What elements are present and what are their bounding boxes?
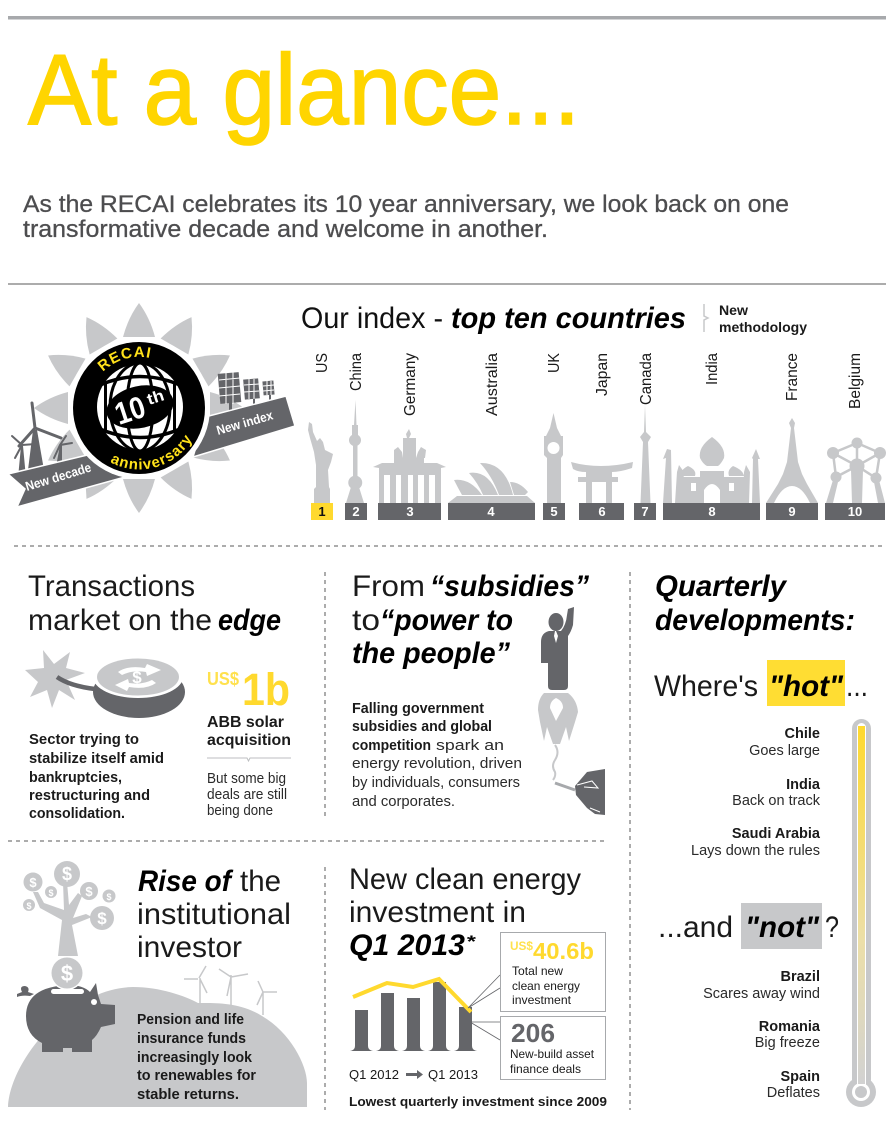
country labels: Canada bbox=[638, 353, 655, 405]
rank bars: 9 bbox=[788, 504, 796, 519]
hot list: Chile bbox=[785, 726, 820, 742]
text: body bbox=[352, 701, 522, 810]
where's hot label: "hot" bbox=[769, 670, 844, 703]
text: body: energy revolution, driven bbox=[352, 756, 522, 772]
intro text bbox=[23, 191, 789, 243]
stat: US$1b: But some big bbox=[207, 771, 286, 787]
icon: money tree: $ bbox=[48, 888, 54, 898]
rank bars: 1 bbox=[318, 504, 326, 519]
heading: “power to bbox=[380, 604, 513, 637]
new methodology note: New bbox=[719, 302, 748, 318]
icon: money tree: $ bbox=[106, 892, 112, 902]
icon: globe bbox=[97, 363, 183, 451]
callout: 40.6b: clean energy bbox=[512, 979, 580, 993]
hot list: Back on track bbox=[732, 793, 821, 809]
country labels: France bbox=[784, 353, 801, 401]
heading bbox=[28, 570, 281, 637]
not list: Deflates bbox=[767, 1085, 820, 1101]
landmark skyline bbox=[308, 400, 886, 503]
text: pension: increasingly look bbox=[137, 1050, 253, 1066]
country labels: Belgium bbox=[847, 353, 864, 409]
text: body: Falling government bbox=[352, 701, 484, 717]
heading: our index bbox=[301, 302, 686, 335]
axis labels with arrow: Q1 2013 bbox=[428, 1067, 478, 1082]
heading: the people” bbox=[352, 637, 510, 670]
panel: subsidies bbox=[352, 570, 605, 815]
callout: 206: New-build asset bbox=[510, 1047, 595, 1061]
not list: Romania bbox=[759, 1019, 821, 1035]
callout: 40.6b: US$ bbox=[510, 939, 533, 953]
not list: Big freeze bbox=[755, 1035, 820, 1051]
hot list: India bbox=[786, 777, 821, 793]
rank bars: 2 bbox=[352, 504, 360, 519]
stat: US$1b bbox=[207, 664, 291, 819]
heading: New clean energy bbox=[349, 863, 581, 896]
icon: sydney opera house bbox=[448, 463, 535, 503]
stat: US$1b: ABB solar bbox=[207, 714, 284, 731]
text: sector: restructuring and bbox=[29, 788, 150, 804]
rank bars: 8 bbox=[708, 504, 716, 519]
heading bbox=[349, 863, 581, 962]
heading bbox=[655, 570, 855, 637]
heading bbox=[137, 865, 291, 964]
ribbon: new decade bbox=[8, 452, 125, 507]
not list: Scares away wind bbox=[703, 986, 820, 1002]
icon: atomium bbox=[826, 438, 886, 503]
stat: US$1b: US$ bbox=[207, 669, 239, 689]
anniversary badge: 10 bbox=[110, 389, 150, 432]
text: body: by individuals, consumers bbox=[352, 775, 520, 791]
and not label: "not" bbox=[745, 911, 820, 944]
where's hot label bbox=[654, 660, 868, 706]
icon: money tree: $ bbox=[85, 884, 93, 899]
panel: clean energy investment bbox=[349, 863, 607, 1109]
callout: 40.6b: investment bbox=[512, 993, 572, 1007]
not list: Spain bbox=[781, 1069, 820, 1085]
heading: institutional bbox=[137, 898, 291, 931]
stat: US$1b: 1b bbox=[242, 664, 290, 715]
heading: Rise of bbox=[138, 865, 234, 898]
intro text: As the RECAI celebrates its 10 year anniversary, we look back on one bbox=[23, 191, 789, 218]
icon: big ben bbox=[544, 413, 563, 503]
bar chart bbox=[350, 975, 500, 1051]
RECAI arc: RECAI bbox=[97, 346, 151, 372]
rank bars: 6 bbox=[598, 504, 606, 519]
stat: US$1b: acquisition bbox=[207, 732, 291, 749]
rank bars: 5 bbox=[550, 504, 558, 519]
hot list: Goes large bbox=[749, 743, 820, 759]
text: body: and corporates. bbox=[352, 794, 455, 810]
heading: to bbox=[352, 604, 380, 637]
icon: oriental pearl tower bbox=[346, 400, 364, 503]
hot list: Lays down the rules bbox=[691, 843, 820, 859]
country labels bbox=[314, 353, 864, 416]
ribbon: new index bbox=[193, 396, 295, 457]
heading: Q1 2013 bbox=[349, 929, 465, 962]
icon: piggy bank: $ bbox=[61, 961, 73, 986]
icon: taj mahal bbox=[663, 437, 760, 503]
heading: Transactions bbox=[28, 570, 195, 603]
title: At a glance... bbox=[28, 34, 580, 146]
axis labels with arrow: Q1 2012 bbox=[349, 1067, 399, 1082]
stat: US$1b: being done bbox=[207, 803, 273, 819]
icon: thermometer bbox=[846, 719, 876, 1107]
country labels: US bbox=[314, 353, 331, 373]
anniversary arc: anniversary bbox=[110, 434, 192, 470]
callout: 206: 206 bbox=[511, 1018, 555, 1048]
heading: “subsidies” bbox=[430, 570, 589, 603]
heading: Quarterly bbox=[655, 570, 787, 603]
icon: money tree: $ bbox=[26, 901, 32, 911]
heading: From bbox=[352, 570, 425, 603]
icon: star burst and pan: $ bbox=[132, 668, 142, 687]
rank bars: 3 bbox=[406, 504, 414, 519]
heading: the bbox=[240, 865, 281, 898]
sun rays bbox=[34, 303, 244, 513]
icon: brandenburg gate bbox=[373, 429, 446, 503]
not list bbox=[703, 969, 821, 1101]
icon: wind turbines bbox=[12, 403, 72, 478]
panel: transactions market bbox=[25, 570, 291, 822]
text: body: spark an bbox=[436, 738, 504, 754]
text: sector bbox=[29, 732, 164, 822]
country labels: India bbox=[704, 353, 721, 385]
text: body: subsidies and global bbox=[352, 719, 492, 735]
callout: 40.6b: 40.6b bbox=[533, 938, 594, 964]
anniversary badge: New index bbox=[215, 407, 275, 438]
country labels: Japan bbox=[594, 353, 611, 396]
country labels: Australia bbox=[484, 353, 501, 416]
text: sector: Sector trying to bbox=[29, 732, 139, 748]
icon: solar panels bbox=[218, 372, 275, 412]
text: pension: Pension and life bbox=[137, 1012, 244, 1028]
text: pension bbox=[137, 1012, 256, 1103]
text: pension: stable returns. bbox=[137, 1087, 239, 1103]
icon: money tree: $ bbox=[62, 864, 72, 884]
hot list: Saudi Arabia bbox=[732, 826, 821, 842]
icon: cn tower bbox=[640, 405, 651, 503]
country labels: UK bbox=[546, 353, 563, 373]
text: sector: stabilize itself amid bbox=[29, 751, 164, 767]
text: pension: insurance funds bbox=[137, 1031, 246, 1047]
not list: Brazil bbox=[780, 969, 820, 985]
where's hot label: Where's bbox=[654, 670, 758, 703]
where's hot label: ... bbox=[846, 670, 868, 703]
icon: eiffel tower bbox=[766, 418, 818, 503]
anniversary badge bbox=[10, 303, 294, 513]
heading: investment in bbox=[349, 896, 526, 929]
and not label bbox=[658, 903, 839, 949]
callout: 40.6b bbox=[500, 932, 606, 1012]
heading: investor bbox=[137, 931, 242, 964]
icon: wind turbines on hill bbox=[184, 966, 277, 1015]
text: pension: to renewables for bbox=[137, 1068, 256, 1084]
anniversary badge: New decade bbox=[23, 460, 93, 494]
and not label: ...and bbox=[658, 911, 733, 944]
heading: developments: bbox=[655, 604, 855, 637]
icon: money tree: $ bbox=[29, 875, 37, 890]
icon: statue of liberty bbox=[308, 422, 333, 503]
heading: our index: top ten countries bbox=[451, 302, 686, 335]
new methodology note: methodology bbox=[719, 319, 807, 335]
callout: 206: finance deals bbox=[510, 1062, 581, 1076]
text: sector: consolidation. bbox=[29, 806, 125, 822]
new methodology note bbox=[704, 302, 807, 335]
rank bars: 10 bbox=[848, 504, 862, 519]
hill bbox=[8, 987, 307, 1107]
callout: 206 bbox=[500, 1016, 606, 1080]
panel: quarterly developments bbox=[654, 570, 876, 1107]
heading: our index: Our index - bbox=[301, 302, 443, 335]
text: lowest quarterly: Lowest quarterly investment since 2009 bbox=[349, 1094, 607, 1109]
text: body: competition bbox=[352, 738, 431, 754]
text: sector: bankruptcies, bbox=[29, 770, 122, 786]
rank bars: 4 bbox=[487, 504, 495, 519]
heading: * bbox=[466, 932, 477, 951]
heading: market on the bbox=[28, 604, 212, 637]
icon: money tree: $ bbox=[97, 909, 107, 928]
icon: torii gate bbox=[571, 462, 633, 503]
country labels: China bbox=[348, 353, 365, 391]
heading bbox=[352, 570, 589, 670]
axis labels with arrow bbox=[349, 1067, 478, 1082]
icon: money tree bbox=[23, 861, 116, 956]
icon: piggy bank bbox=[17, 956, 115, 1052]
anniversary badge: th bbox=[145, 387, 166, 409]
and not label: ? bbox=[825, 911, 839, 944]
rank bars: 7 bbox=[641, 504, 649, 519]
callout: 40.6b: Total new bbox=[512, 964, 563, 978]
rank bars bbox=[311, 503, 885, 520]
panel: institutional investor bbox=[8, 861, 307, 1107]
hot list bbox=[691, 726, 821, 859]
country labels: Germany bbox=[402, 353, 419, 416]
icon: star burst and pan bbox=[25, 650, 185, 718]
icon: rocket businessman bbox=[538, 607, 605, 815]
heading: edge bbox=[218, 604, 281, 637]
intro text: transformative decade and welcome in another. bbox=[23, 216, 548, 243]
stat: US$1b: deals are still bbox=[207, 787, 287, 803]
